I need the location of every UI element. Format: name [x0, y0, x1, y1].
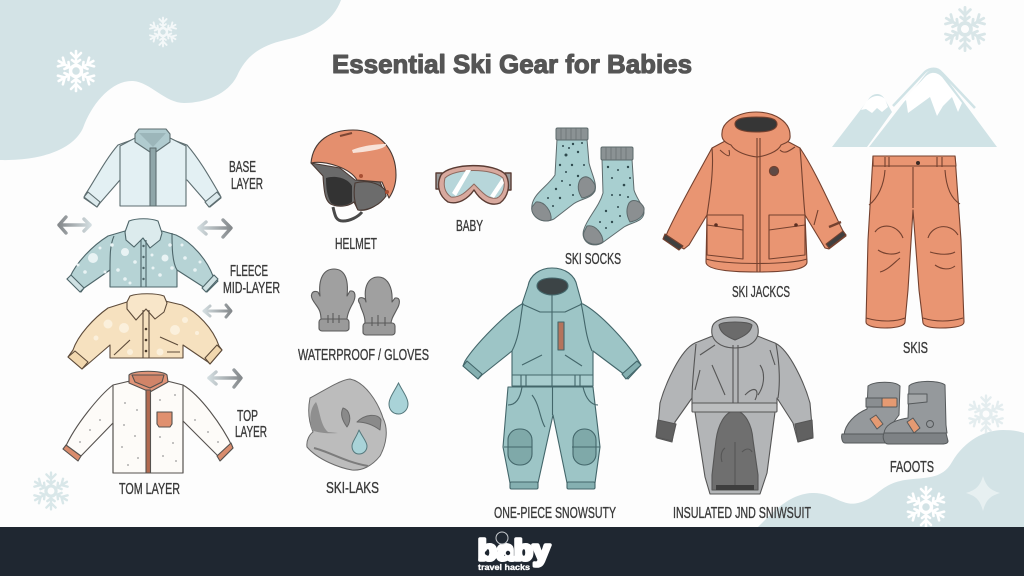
icon: balaclava: [307, 379, 386, 470]
label: top layer: [235, 408, 267, 441]
label: ski-laks: SKI-LAKS: [326, 480, 379, 497]
icon: one-piece snowsuit: [463, 268, 641, 489]
label: helmet: HELMET: [335, 236, 377, 253]
icon: ski boots: [842, 381, 948, 444]
icon: mountains: [832, 69, 997, 147]
title: Essential Ski Gear for Babies: [332, 49, 692, 79]
footer bar: [0, 527, 1024, 576]
decorative blob: top left: [0, 0, 341, 160]
icon: ski jacket: [663, 112, 846, 272]
icon: right sock: [583, 147, 644, 245]
label: top layer: TOP: [237, 408, 258, 425]
arrow: right of top layer: [209, 370, 241, 387]
icon: snowflake top left small: [149, 18, 177, 46]
icon: snowflake bottom left: [33, 473, 69, 509]
label: base layer: LAYER: [231, 176, 263, 193]
icon: snowflake right: [968, 396, 1004, 432]
label: base layer: [229, 159, 263, 193]
icon: mittens: [311, 269, 399, 335]
decorative blob: bottom right: [758, 430, 1024, 527]
cream shirt pattern: [94, 317, 199, 356]
panel: base layer jacket: [84, 129, 221, 207]
icon: fleece buttons: [142, 245, 145, 280]
label: boots: FAOOTS: [890, 459, 934, 476]
panel: top layer jacket: [63, 371, 233, 473]
icon: water drop: [389, 383, 408, 414]
label: base layer: BASE: [229, 159, 256, 176]
icon: helmet: [311, 130, 396, 221]
icon: snowflake top right: [944, 7, 986, 51]
label: ski jackets: SKI JACKCS: [732, 284, 790, 301]
icon: left sock: [532, 128, 595, 221]
icon: snowflake top left large: [56, 51, 96, 91]
label: fleece mid-layer: [223, 263, 280, 297]
label: waterproof gloves: WATERPROOF / GLOVES: [298, 347, 429, 364]
icon: snowflake bottom right: [906, 487, 946, 527]
panel: cream shirt: [68, 294, 222, 369]
logo: baby: [478, 535, 550, 567]
label: insulated suit: INSULATED JND SNIWSUIT: [673, 505, 811, 522]
icon: ski pants: [866, 156, 964, 328]
fleece snow pattern: [76, 243, 202, 284]
arrow: right of cream shirt: [204, 305, 231, 317]
label: top layer: LAYER: [235, 424, 267, 441]
label: one-piece snowsuit: ONE-PIECE SNOWSUTY: [494, 505, 616, 522]
arrow: right of fleece: [199, 220, 231, 237]
label: fleece mid-layer: MID-LAYER: [223, 280, 280, 297]
arrow: left of fleece: [59, 217, 90, 233]
sock speckles: [547, 142, 631, 229]
icon: insulated jacket suit: [656, 317, 813, 494]
icon: goggles: [436, 166, 511, 204]
label: ski socks: SKI SOCKS: [565, 251, 621, 268]
icon: sparkle: [966, 476, 1000, 511]
label: fleece mid-layer: FLEECE: [230, 263, 268, 280]
top layer dots: [79, 394, 219, 466]
logo: travel hacks: [478, 562, 530, 572]
panel: fleece mid-layer shirt: [67, 219, 218, 292]
label: baby: BABY: [456, 218, 483, 235]
label: skis: SKIS: [903, 340, 928, 357]
label: tom layer: TOM LAYER: [119, 481, 180, 498]
icon: cream shirt buttons: [145, 328, 147, 352]
